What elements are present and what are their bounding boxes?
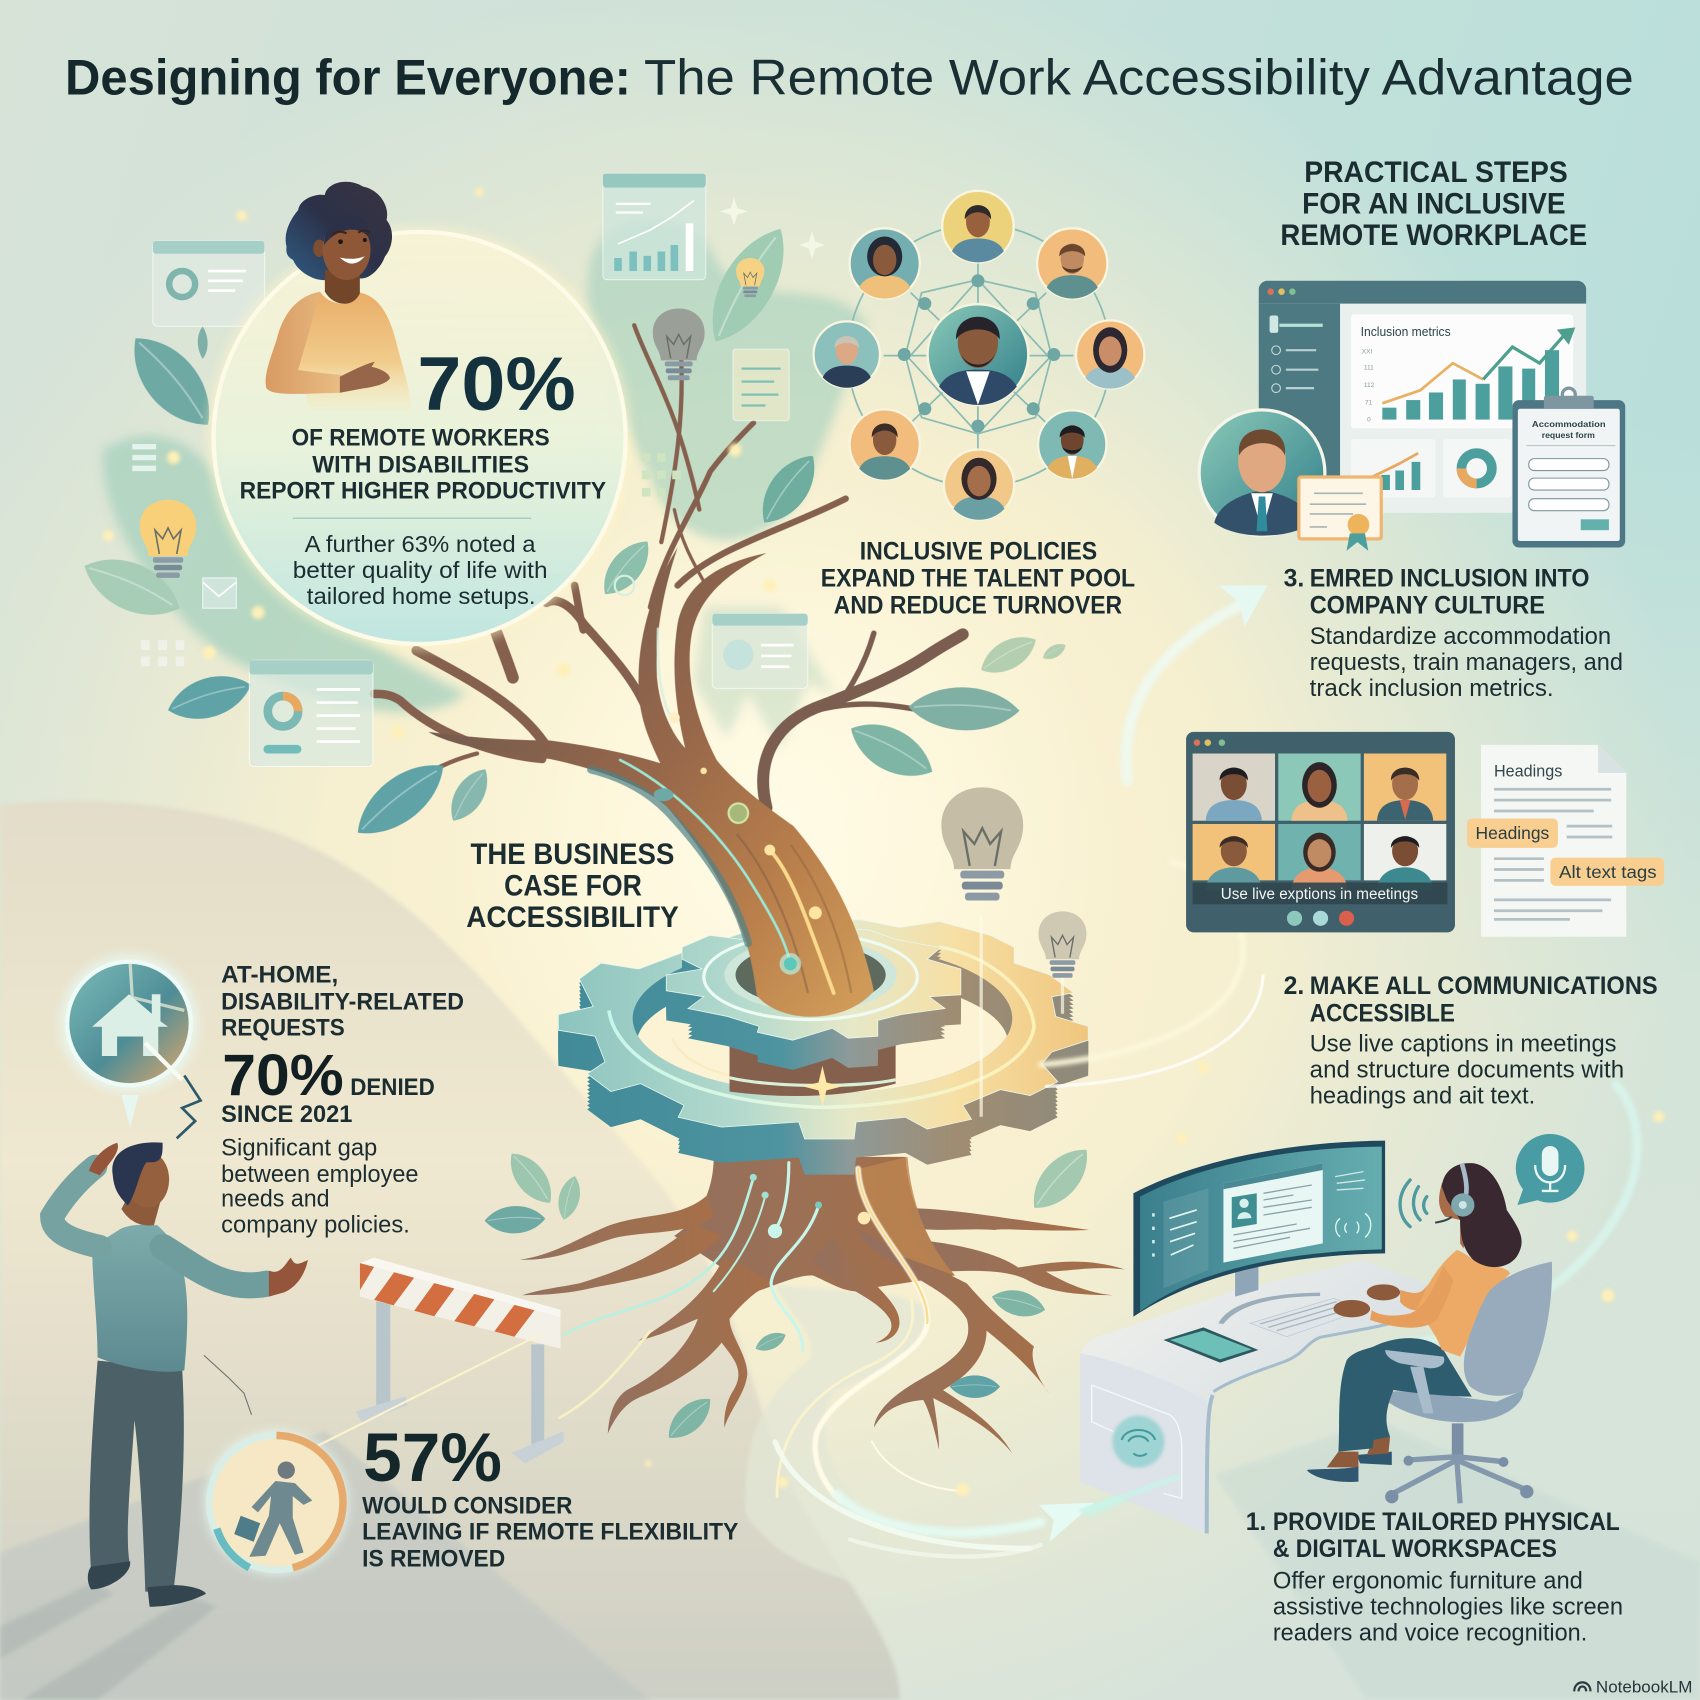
avatar: upper right (1037, 228, 1107, 301)
road barrier (204, 1258, 564, 1464)
avatar: bottom (944, 450, 1014, 522)
stat 57%: IS REMOVED (362, 1546, 505, 1573)
step 3 text: COMPANY CULTURE (1310, 592, 1545, 620)
woman stat bubble (208, 182, 631, 649)
network diagram (814, 191, 1144, 522)
bar chart: 111 (1364, 365, 1374, 372)
dashboard illustration (1259, 281, 1586, 513)
upper gear (666, 927, 961, 1070)
step 2 text (1284, 972, 1658, 1110)
stat 57% (362, 1420, 738, 1573)
foliage glow behind the tree (103, 220, 867, 748)
avatar: center (928, 304, 1028, 408)
talent pool caption: EXPAND THE TALENT POOL (821, 565, 1135, 593)
video tile 5 (1278, 824, 1361, 892)
large gear (558, 920, 1088, 1175)
monitor (1133, 1141, 1385, 1324)
stat description: REPORT HIGHER PRODUCTIVITY (240, 478, 606, 505)
stars (720, 197, 825, 259)
video tile 6 (1364, 824, 1446, 882)
stat 57%: 57% (363, 1420, 502, 1496)
business case heading: THE BUSINESS (471, 839, 674, 871)
bar chart (1362, 327, 1575, 424)
sparkles (103, 188, 1664, 1496)
step 2 text: headings and ait text. (1310, 1083, 1535, 1110)
denied requests text: DENIED (350, 1074, 435, 1101)
practical steps heading (1280, 157, 1587, 252)
clipboard form: Accommodation (1532, 420, 1606, 429)
title: Designing for Everyone: (65, 49, 631, 105)
avatar: left (814, 321, 880, 390)
step 1 text: & DIGITAL WORKSPACES (1273, 1535, 1557, 1563)
NotebookLM logo: NotebookLM (1596, 1677, 1692, 1696)
quality of life note (293, 531, 548, 609)
chip: alt text: Alt text tags (1559, 862, 1657, 882)
step 3 text: Standardize accommodation (1310, 623, 1611, 650)
denied requests text: DISABILITY-RELATED (221, 988, 464, 1015)
bar chart: 0 (1367, 417, 1371, 424)
title (65, 49, 1634, 105)
step 3 text: EMRED INCLUSION INTO (1310, 565, 1589, 593)
video tile 2 (1278, 754, 1361, 823)
denied requests text: Significant gap (221, 1135, 377, 1162)
step 1 text: Offer ergonomic furniture and (1273, 1567, 1583, 1594)
step 1 text: 1. (1246, 1508, 1266, 1536)
leaves (75, 216, 1100, 1447)
quality of life note: A further 63% noted a (305, 531, 536, 557)
desk (1080, 1260, 1433, 1533)
video tile 1 (1193, 754, 1275, 823)
denied requests text: needs and (221, 1186, 330, 1213)
practical steps heading: FOR AN INCLUSIVE (1302, 189, 1566, 221)
stat 57%: WOULD CONSIDER (362, 1493, 572, 1520)
quality of life note: better quality of life with (293, 557, 548, 583)
man looking at barrier (52, 1142, 308, 1607)
step 1 text: PROVIDE TAILORED PHYSICAL (1273, 1508, 1620, 1536)
practical steps heading: REMOTE WORKPLACE (1280, 220, 1587, 252)
denied requests text (221, 961, 464, 1239)
step 2 text: Use live captions in meetings (1310, 1031, 1617, 1058)
bar chart: 71 (1365, 399, 1373, 406)
step 3 text: 3. (1284, 565, 1304, 593)
chart title: Inclusion metrics (1361, 325, 1451, 339)
icon: woman portrait (266, 182, 412, 410)
floating dashboard cards (132, 173, 808, 767)
denied requests text: 70% (222, 1043, 344, 1108)
quality of life note: tailored home setups. (307, 583, 536, 609)
video call window (1186, 732, 1455, 932)
brown column between gears (730, 1038, 896, 1107)
caption text: Use live exptions in meetings (1221, 886, 1418, 903)
step 3 text: requests, train managers, and (1310, 649, 1623, 676)
denied requests text: company policies. (221, 1212, 410, 1239)
video tile 4 (1192, 824, 1275, 882)
pale river under the roots (745, 1283, 929, 1592)
step 2 text: MAKE ALL COMMUNICATIONS (1310, 972, 1658, 1000)
step 1 text: readers and voice recognition. (1273, 1619, 1587, 1646)
chip: alt text (1550, 858, 1664, 886)
title: The Remote Work Accessibility Advantage (644, 49, 1634, 105)
avatar: top (942, 191, 1014, 265)
denied requests text: between employee (221, 1161, 418, 1188)
desk workstation (1080, 1134, 1584, 1533)
step 2 text: and structure documents with (1310, 1057, 1624, 1084)
business case heading: CASE FOR (504, 871, 642, 903)
stat description: WITH DISABILITIES (312, 452, 529, 479)
step 1 text (1246, 1508, 1623, 1646)
clipboard form (1512, 388, 1625, 548)
denied requests text: SINCE 2021 (221, 1101, 352, 1128)
tablet and keyboard (1163, 1298, 1363, 1363)
step 3 text (1284, 565, 1623, 702)
icon: house with crack (60, 954, 201, 1138)
stat description (240, 425, 606, 505)
talent pool caption: INCLUSIVE POLICIES (860, 537, 1097, 565)
icon: person leaving ring (205, 1431, 348, 1574)
flow swooshes with arrows (775, 585, 1637, 1557)
talent pool caption (821, 537, 1135, 620)
sound waves (1400, 1180, 1427, 1227)
bar chart: 112 (1364, 382, 1375, 389)
document with headings and alt text: Headings (1494, 762, 1562, 780)
business case heading (466, 839, 679, 934)
avatar: lower left (850, 409, 920, 482)
step 2 text: 2. (1284, 972, 1304, 1000)
light bulbs on the tree (140, 258, 764, 578)
chair back and armrest (1385, 1262, 1552, 1413)
avatar: upper left (850, 228, 920, 301)
icon: microphone bubble (1516, 1134, 1584, 1205)
chip: headings: Headings (1476, 823, 1550, 843)
avatar: lower right (1038, 410, 1106, 481)
certificate (1299, 477, 1381, 551)
denied requests text: REQUESTS (221, 1014, 345, 1041)
step 1 text: assistive technologies like screen (1273, 1593, 1623, 1620)
step 2 text: ACCESSIBLE (1310, 999, 1455, 1027)
bar chart: XXI (1362, 348, 1372, 355)
talent pool caption: AND REDUCE TURNOVER (834, 592, 1122, 620)
step 3 text: track inclusion metrics. (1310, 675, 1554, 702)
stat 57%: LEAVING IF REMOTE FLEXIBILITY (362, 1519, 738, 1546)
avatar: right (1076, 320, 1144, 391)
person at desk (1307, 1163, 1522, 1482)
tree (374, 325, 963, 1017)
big and small grey bulbs (941, 787, 1086, 1117)
roots (520, 1157, 1125, 1453)
clipboard form: request form (1542, 431, 1595, 440)
avatar: manager with certificate (1199, 410, 1381, 551)
document with headings and alt text (1467, 745, 1664, 937)
video tile 3 (1364, 754, 1446, 823)
stat 70%: 70% (417, 342, 576, 427)
glowing strands on the roots (560, 1163, 963, 1500)
denied requests text: AT-HOME, (221, 961, 338, 988)
stat description: OF REMOTE WORKERS (292, 425, 550, 452)
chip: headings (1467, 819, 1558, 848)
business case heading: ACCESSIBILITY (466, 902, 679, 934)
chair (1380, 1390, 1533, 1503)
practical steps heading: PRACTICAL STEPS (1304, 157, 1568, 189)
